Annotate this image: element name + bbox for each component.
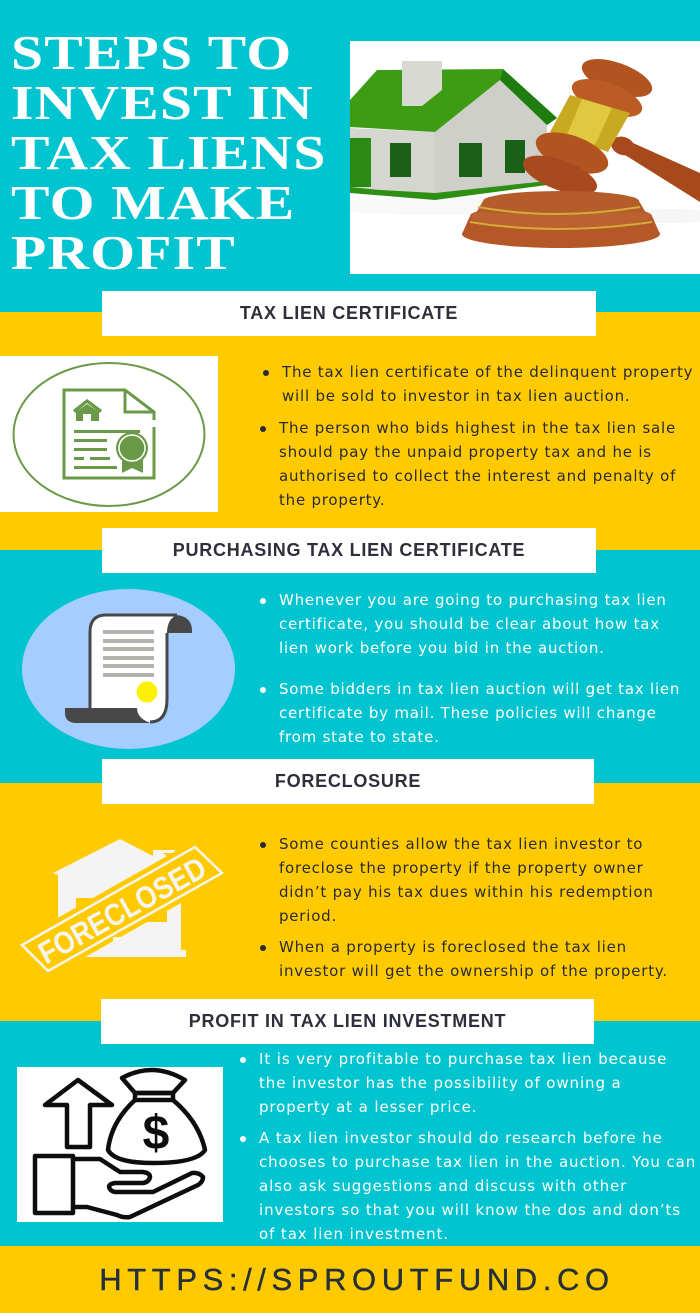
text block: profit second bullet: of tax lien investment. [259,1225,449,1243]
text block: profit second bullet: A tax lien investor should do research before he [259,1129,663,1147]
text block: profit first bullet: property at a lesser price. [259,1098,477,1116]
band: section 1 background [0,312,700,550]
header: purchasing tax lien certificate: PURCHASING TAX LIEN CERTIFICATE [173,540,525,560]
text block: profit first bullet: It is very profitable to purchase tax lien because [259,1050,667,1068]
text block: foreclosure second bullet [260,938,668,980]
text block: profit second bullet: chooses to purchase tax lien in the auction. You can [259,1153,696,1171]
icon: paper scroll [22,589,235,749]
text block: tax lien certificate [263,363,693,405]
header: purchasing tax lien certificate [102,528,596,573]
band: footer background [0,1246,700,1313]
text block: purchasing second bullet: Some bidders in tax lien auction will get tax lien [279,680,680,698]
header: foreclosure: FORECLOSURE [275,771,421,791]
header: profit in tax lien investment: PROFIT IN TAX LIEN INVESTMENT [189,1011,506,1031]
title: INVEST IN [11,75,314,130]
panel: certificate icon [0,356,218,512]
text block: foreclosure first bullet [260,835,654,925]
text block: profit first bullet [240,1050,667,1116]
text block: profit second bullet: also ask suggestions and discuss with other [259,1177,627,1195]
title: PROFIT [11,225,236,280]
text block: tax lien certificate second bullet: should pay the unpaid property tax and he is [279,443,652,461]
title [11,25,327,280]
title: STEPS TO [11,25,292,80]
header: foreclosure [102,759,594,804]
illustration: house and gavel [350,41,700,274]
band: section 3 background [0,783,700,1021]
icon: money bag, hand and arrow: $ [143,1107,170,1160]
text block: purchasing second bullet: from state to state. [279,728,440,746]
header: tax lien certificate: TAX LIEN CERTIFICATE [240,303,458,323]
header: tax lien certificate [102,291,596,336]
icon: foreclosed house: FORECLOSED [32,850,212,971]
text block: purchasing first bullet: Whenever you are going to purchasing tax lien [279,591,667,609]
text block: tax lien certificate second bullet: authorised to collect the interest and penalty of [279,467,676,485]
text block: profit second bullet [240,1129,696,1243]
text block: tax lien certificate second bullet: The person who bids highest in the tax lien sale [279,419,676,437]
text block: foreclosure first bullet: period. [279,907,337,925]
header: profit in tax lien investment [101,999,594,1044]
text block: foreclosure first bullet: Some counties allow the tax lien investor to [279,835,643,853]
text block: tax lien certificate second bullet: the property. [279,491,385,509]
text block: purchasing second bullet [260,680,680,746]
text block: tax lien certificate: The tax lien certificate of the delinquent property [282,363,693,381]
text block: purchasing second bullet: certificate by mail. These policies will change [279,704,657,722]
text block: foreclosure first bullet: foreclose the property if the property owner [279,859,644,877]
text block: tax lien certificate: will be sold to investor in tax lien auction. [282,387,630,405]
text block: purchasing first bullet: certificate, you should be clear about how tax [279,615,660,633]
text block: purchasing first bullet: lien work before you bid in the auction. [279,639,605,657]
text block: foreclosure first bullet: didn’t pay his tax dues within his redemption [279,883,654,901]
icon: money bag, hand and arrow [17,1067,223,1222]
title: TO MAKE [11,175,295,230]
title: TAX LIENS [11,125,327,180]
text block: tax lien certificate second bullet [260,419,676,509]
text block: profit first bullet: the investor has the possibility of owning a [259,1074,622,1092]
text block: foreclosure second bullet: When a property is foreclosed the tax lien [279,938,627,956]
text block: foreclosure second bullet: investor will get the ownership of the property. [279,962,668,980]
text block: purchasing first bullet [260,591,667,657]
footer: website url: HTTPS://SPROUTFUND.CO [99,1262,615,1297]
text block: profit second bullet: investors so that you will know the dos and don’ts [259,1201,681,1219]
